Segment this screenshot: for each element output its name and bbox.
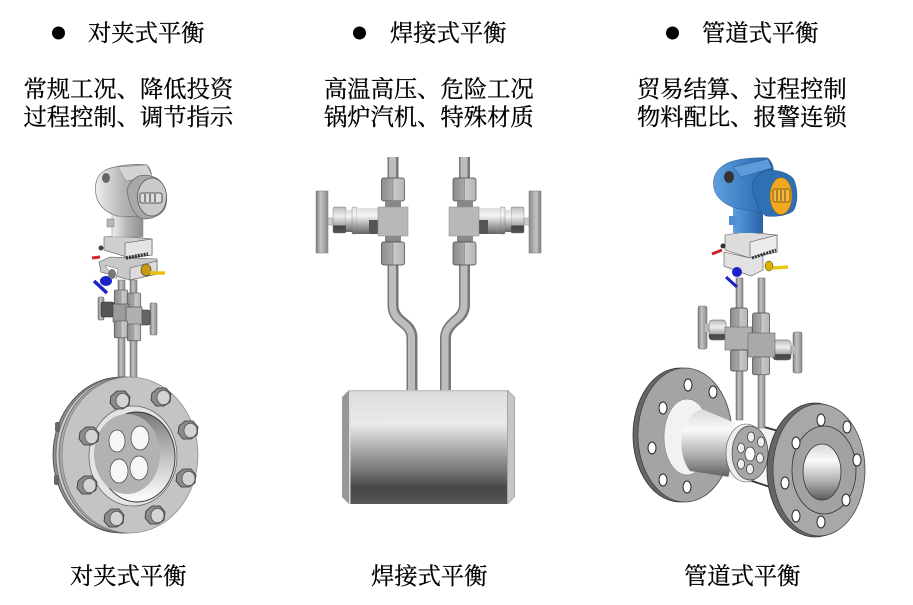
column 1 description: 常规工况、降低投资 [24,76,234,103]
column 2 description: 高温高压、危险工况 [324,76,534,103]
instrument valves [98,290,157,341]
device: welded balance flowmeter [316,157,541,504]
left impulse line [393,157,412,390]
meter tube [681,409,782,487]
colored drain valves [92,257,165,293]
column 3 description [637,76,847,131]
column 3 heading: pipeline type: 管道式平衡 [702,20,818,47]
right impulse line [446,157,464,390]
bottom label: welded type: 焊接式平衡 [371,563,487,590]
manifold [98,236,157,280]
flange body [53,377,198,533]
colored drain valves [712,250,788,287]
flange bolts [54,388,198,527]
device: pipeline balance flowmeter [633,158,865,537]
device: wafer balance flowmeter [53,164,198,533]
left impulse line highlight [392,157,412,390]
impulse pipes [736,278,765,428]
right flange [767,403,865,537]
column 3 description: 贸易结算、过程控制 [637,76,847,103]
column 2 description: 锅炉汽机、特殊材质 [324,104,534,131]
gray transmitter [95,164,167,237]
column 1 description: 过程控制、调节指示 [24,104,234,131]
left valve [698,306,752,371]
left flange [633,368,732,502]
column 3 description: 物料配比、报警连锁 [637,104,847,131]
cylinder body [342,390,515,504]
bottom label: wafer type: 对夹式平衡 [70,563,186,590]
column 1 description [24,76,234,131]
column 2 heading: welded type: 焊接式平衡 [390,20,506,47]
orifice plate [726,424,768,482]
right valve [449,178,541,265]
impulse pipes [118,280,137,380]
manifold [720,232,777,276]
bottom label: pipeline type: 管道式平衡 [684,563,800,590]
column 1 heading: wafer type: 对夹式平衡 [88,20,204,47]
right impulse line highlight [445,157,464,390]
right valve [748,313,802,375]
blue transmitter [713,158,797,233]
left valve [316,178,408,265]
column 2 description [324,76,534,131]
